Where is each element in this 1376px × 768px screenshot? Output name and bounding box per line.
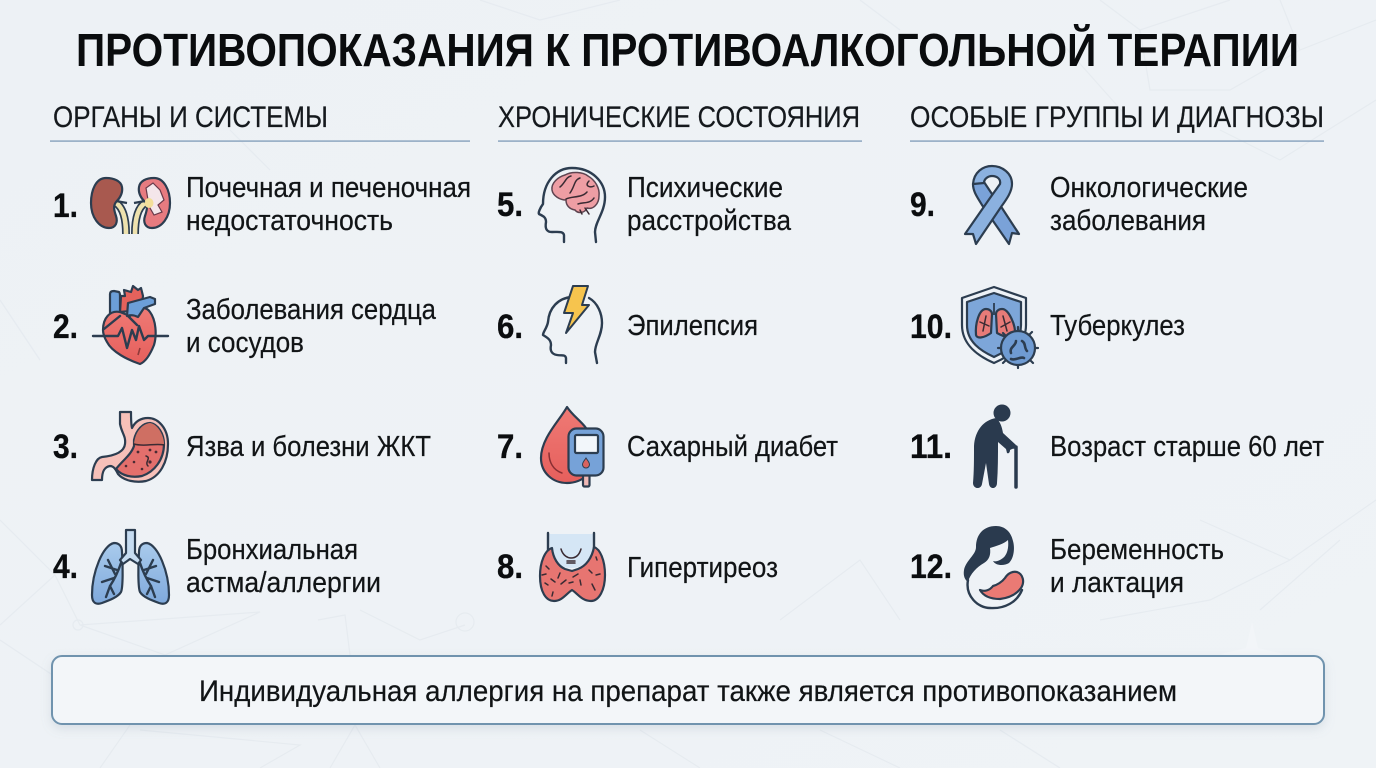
icon: head with lightning bbox=[543, 286, 602, 363]
item 2 bbox=[53, 286, 437, 364]
item 10 bbox=[910, 287, 1185, 368]
item 7 bbox=[497, 407, 838, 486]
number 12: 12. bbox=[910, 548, 952, 586]
label: heart and vessel disease bbox=[186, 294, 437, 359]
number 9: 9. bbox=[910, 186, 935, 224]
item 9 bbox=[910, 166, 1248, 244]
number 3: 3. bbox=[53, 428, 78, 466]
label: ulcer and GI disease: Язва и болезни ЖКТ bbox=[186, 431, 431, 463]
number 2: 2. bbox=[53, 308, 78, 346]
label: heart and vessel disease: Заболевания сердца bbox=[186, 294, 437, 326]
label: renal and hepatic failure: недостаточность bbox=[186, 205, 393, 237]
icon: heart bbox=[93, 286, 168, 364]
item 3 bbox=[53, 412, 431, 482]
icon: awareness ribbon bbox=[965, 166, 1019, 244]
label: oncological diseases: заболевания bbox=[1050, 205, 1206, 237]
icon: elderly person with cane bbox=[973, 404, 1016, 488]
label: tuberculosis: Туберкулез bbox=[1050, 310, 1185, 342]
item 5 bbox=[497, 168, 792, 242]
label: renal and hepatic failure bbox=[186, 172, 471, 237]
label: pregnancy and lactation bbox=[1050, 534, 1224, 599]
column: organs and systems bbox=[50, 101, 471, 604]
item 8 bbox=[497, 533, 778, 601]
heading: organs and systems: ОРГАНЫ И СИСТЕМЫ bbox=[53, 101, 328, 134]
column: chronic conditions bbox=[497, 101, 862, 601]
number 6: 6. bbox=[497, 308, 523, 346]
item 4 bbox=[53, 530, 381, 604]
label: mental disorders bbox=[627, 172, 792, 237]
callout text: Индивидуальная аллергия на препарат также является противопоказанием bbox=[199, 675, 1177, 708]
heading: chronic conditions: ХРОНИЧЕСКИЕ СОСТОЯНИЯ bbox=[498, 101, 860, 134]
label: pregnancy and lactation: и лактация bbox=[1050, 567, 1184, 599]
item 12 bbox=[910, 526, 1224, 608]
number 5: 5. bbox=[497, 186, 523, 224]
item 11 bbox=[910, 404, 1324, 488]
label: pregnancy and lactation: Беременность bbox=[1050, 534, 1224, 566]
label: asthma and allergy: Бронхиальная bbox=[186, 534, 358, 566]
label: oncological diseases: Онкологические bbox=[1050, 172, 1248, 204]
number 8: 8. bbox=[497, 548, 523, 586]
label: asthma and allergy bbox=[186, 534, 381, 599]
icon: thyroid bbox=[540, 533, 605, 601]
label: mental disorders: расстройства bbox=[627, 205, 792, 237]
icon: stomach bbox=[92, 412, 168, 482]
label: asthma and allergy: астма/аллергии bbox=[186, 567, 381, 599]
number 11: 11. bbox=[910, 428, 952, 466]
label: mental disorders: Психические bbox=[627, 172, 783, 204]
icon: shield, lungs and bacterium bbox=[962, 287, 1038, 368]
icon: blood drop and glucose meter bbox=[541, 407, 604, 486]
sparkle bbox=[1220, 622, 1284, 686]
label: renal and hepatic failure: Почечная и печеночная bbox=[186, 172, 471, 204]
item 6 bbox=[497, 286, 758, 363]
column: special groups and diagnoses bbox=[910, 101, 1324, 608]
number 4: 4. bbox=[53, 548, 78, 586]
icon: mother nursing baby bbox=[964, 526, 1023, 608]
icon: lungs bbox=[92, 530, 169, 604]
callout: individual allergy note bbox=[52, 656, 1324, 724]
item 1 bbox=[53, 172, 471, 237]
label: hyperthyroidism: Гипертиреоз bbox=[627, 552, 778, 584]
label: oncological diseases bbox=[1050, 172, 1248, 237]
number 7: 7. bbox=[497, 428, 523, 466]
label: heart and vessel disease: и сосудов bbox=[186, 327, 304, 359]
number 10: 10. bbox=[910, 308, 952, 346]
label: epilepsy: Эпилепсия bbox=[627, 310, 758, 342]
label: diabetes: Сахарный диабет bbox=[627, 431, 838, 463]
icon: head with brain bbox=[539, 168, 605, 242]
number 1: 1. bbox=[53, 187, 78, 225]
heading: special groups and diagnoses: ОСОБЫЕ ГРУППЫ И ДИАГНОЗЫ bbox=[910, 101, 1324, 134]
icon: kidneys bbox=[91, 178, 170, 234]
label: age over 60: Возраст старше 60 лет bbox=[1050, 431, 1324, 463]
